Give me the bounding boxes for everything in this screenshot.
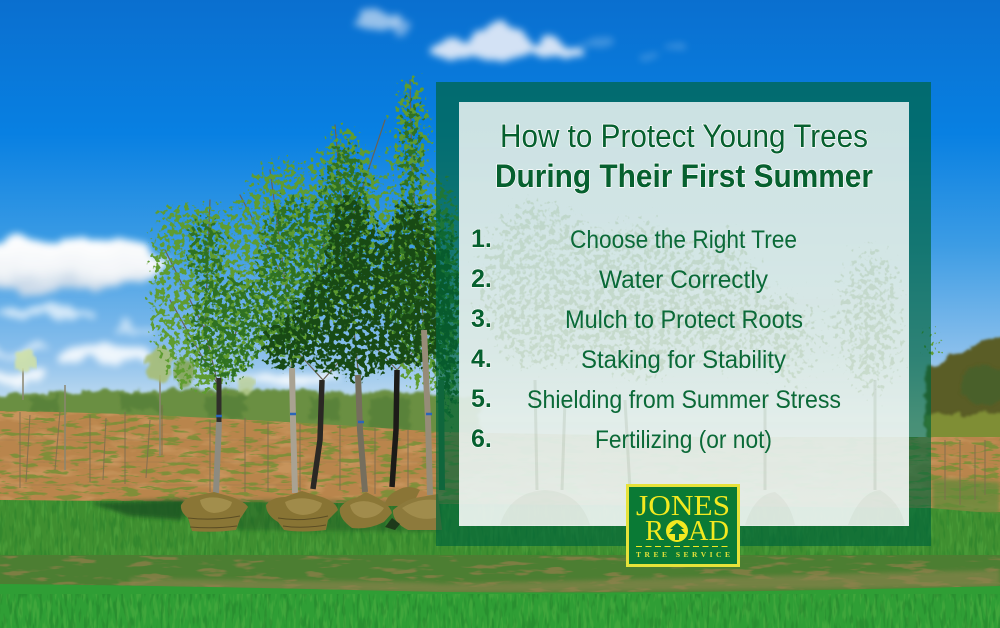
panel: inner translucent card: [459, 102, 909, 526]
list numbers: [471, 225, 492, 453]
title line 1: How to Protect Young Trees: [500, 118, 868, 154]
foreground bright grass: [0, 584, 1000, 628]
list numbers: 1.: [471, 225, 492, 253]
logo background: [628, 486, 738, 566]
title: [495, 118, 873, 194]
numbered list: [471, 225, 841, 454]
logo dashes: [636, 546, 730, 548]
tree foliage, deep shadow: [258, 191, 460, 414]
title line 2: During Their First Summer: [495, 158, 873, 194]
list items: Staking for Stability: [581, 346, 786, 374]
list numbers: 2.: [471, 265, 492, 293]
panel: outer teal frame: [436, 82, 931, 546]
ghost trees inside card: [470, 190, 912, 525]
list numbers: 4.: [471, 345, 492, 373]
clouds: [0, 10, 688, 387]
mown dirt strip: [0, 555, 1000, 600]
list items: Mulch to Protect Roots: [565, 306, 803, 334]
logo word ROAD: R: [645, 515, 665, 547]
sky: [0, 0, 1000, 445]
list numbers: 5.: [471, 385, 492, 413]
logo word JONES: JONES: [636, 490, 730, 522]
list items: Fertilizing (or not): [595, 426, 772, 454]
list items: Water Correctly: [599, 266, 768, 294]
logo word ROAD: [645, 515, 729, 547]
tree foliage, light outer layer: [144, 72, 460, 398]
row of young trees: [143, 67, 469, 532]
background saplings: [15, 347, 254, 470]
tree trunks: [216, 330, 442, 495]
list items: [527, 226, 841, 454]
list items: Shielding from Summer Stress: [527, 386, 841, 414]
logo word ROAD: AD: [688, 515, 729, 547]
list numbers: 6.: [471, 425, 492, 453]
logo tagline: TREE SERVICE: [636, 550, 730, 559]
tree branches: [165, 80, 424, 385]
tree foliage, middle layer: [181, 85, 466, 440]
nursery field: [0, 411, 1000, 515]
list items: Choose the Right Tree: [570, 226, 797, 254]
distant tree line: [0, 334, 1000, 450]
burlap root balls: [181, 487, 442, 532]
grass: [0, 499, 1000, 600]
young tree stakes: [0, 405, 985, 505]
logo: Jones Road Tree Service: [628, 486, 738, 566]
right edge tree fragment: [918, 321, 946, 369]
list numbers: 3.: [471, 305, 492, 333]
